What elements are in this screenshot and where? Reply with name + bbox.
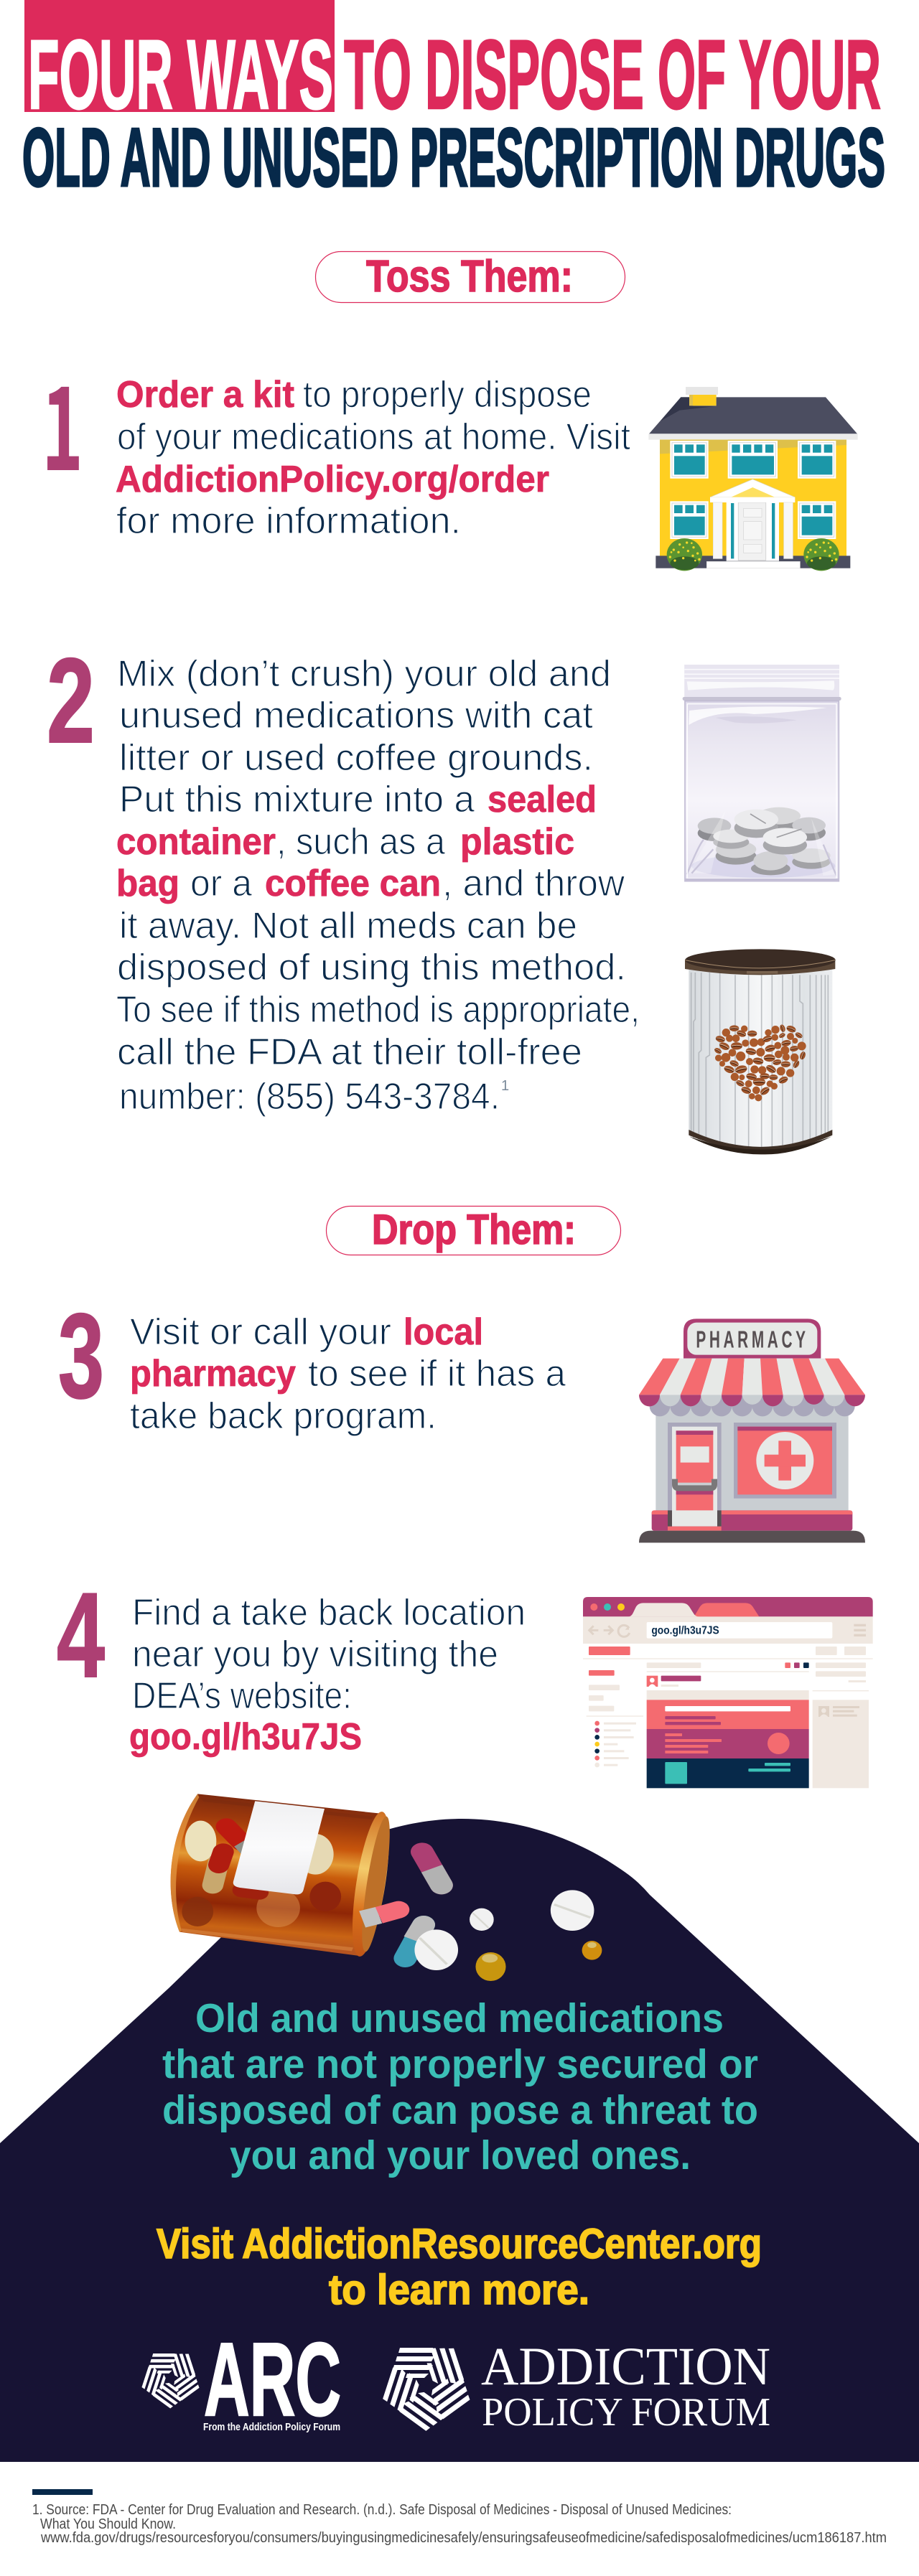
step 3 text: Visit or call your <box>130 1311 391 1353</box>
call to action text: Visit AddictionResourceCenter.org <box>157 2221 762 2267</box>
step 1 number: 1 <box>42 337 83 504</box>
step 4 number: 4 <box>57 1568 105 1702</box>
icon: yellow house <box>648 387 858 571</box>
step 2 text: disposed of using this method. <box>117 947 626 988</box>
capsule: pink <box>363 1901 409 1919</box>
step 2 text: Mix (don’t crush) your old and <box>117 653 611 695</box>
panel: dark call-to-action shape <box>0 1819 919 2462</box>
footnote <box>32 2489 887 2546</box>
step 4 text: DEA’s website: <box>132 1675 352 1717</box>
step 2 text: coffee can <box>265 863 441 904</box>
step 1 text: for more information. <box>116 500 461 542</box>
warning text: disposed of can pose a threat to <box>162 2087 758 2133</box>
step 2 text: To see if this method is appropriate, <box>116 989 640 1031</box>
call to action text <box>157 2221 762 2313</box>
icon: browser window <box>583 1597 873 1788</box>
warning text: that are not properly secured or <box>162 2041 758 2087</box>
step 2 text: number: (855) 543-3784. <box>119 1076 500 1118</box>
step 4 text: Find a take back location <box>132 1592 526 1634</box>
ARC wordmark: ARC <box>204 2321 341 2437</box>
step 2 text: , such as a <box>276 821 445 863</box>
step 2 text: it away. Not all meds can be <box>119 905 577 947</box>
title <box>22 0 885 204</box>
icon: spilled pill bottle <box>171 1794 602 1981</box>
step 2 text: sealed <box>488 779 597 820</box>
icon: plastic zip bag with pills <box>683 665 841 881</box>
step 3 text <box>130 1311 566 1437</box>
step 4 text <box>129 1592 526 1758</box>
ARC tagline: From the Addiction Policy Forum <box>203 2421 340 2433</box>
call to action text: to learn more. <box>329 2267 589 2313</box>
icon: pharmacy storefront <box>639 1319 865 1542</box>
step 2 text: call the FDA at their toll-free <box>117 1031 582 1073</box>
step 2 text: , and throw <box>442 863 625 904</box>
step 3 text: to see if it has a <box>308 1353 566 1395</box>
capsule: purple and grey <box>422 1852 453 1894</box>
step 3 text: take back program. <box>130 1395 437 1437</box>
title line 1 white: FOUR WAYS <box>28 20 333 130</box>
icon: ARC pentagon mark <box>140 2349 203 2411</box>
step 1 text <box>116 374 631 542</box>
title highlight block <box>24 0 335 112</box>
step 1 text: to properly dispose <box>303 374 592 416</box>
step 2 text: or a <box>190 863 252 904</box>
step 2 text: unused medications with cat <box>119 695 594 736</box>
step 4 text: near you by visiting the <box>132 1634 498 1675</box>
step 2 text: Put this mixture into a <box>119 779 475 820</box>
step 2 number: 2 <box>47 633 95 768</box>
step 4 text: goo.gl/h3u7JS <box>129 1716 362 1758</box>
icon: pentagon mark <box>381 2341 476 2435</box>
capsule: teal and grey <box>405 1916 435 1958</box>
step 2 text <box>116 653 640 1118</box>
warning text: you and your loved ones. <box>230 2132 691 2178</box>
section heading: Drop Them: Drop Them: <box>372 1207 576 1253</box>
step 2 text: litter or used coffee grounds. <box>119 737 593 779</box>
wordmark line 2: POLICY FORUM <box>482 2390 770 2435</box>
icon: coffee can with bean heart <box>685 949 836 1154</box>
step 1 text: Order a kit <box>116 374 294 416</box>
footnote: 1. Source: FDA - Center for Drug Evaluation and Research. (n.d.). Safe Disposal of Medicines - Disposal of Unused Medicines: <box>32 2502 732 2518</box>
sign text: PHARMACY: PHARMACY <box>696 1326 809 1352</box>
step 3 text: pharmacy <box>130 1353 296 1395</box>
warning text: Old and unused medications <box>195 1995 724 2041</box>
warning text <box>162 1995 758 2178</box>
step 2 text: bag <box>116 863 179 904</box>
wordmark line 1: ADDICTION <box>481 2337 770 2397</box>
step 3 number: 3 <box>58 1288 104 1423</box>
step 1 text: of your medications at home. Visit <box>117 416 631 458</box>
step 2 text: 1 <box>501 1078 509 1094</box>
section heading: Toss Them: Toss Them: <box>366 252 573 301</box>
step 3 text: local <box>403 1311 483 1353</box>
logo: Addiction Policy Forum <box>381 2337 770 2435</box>
step 2 text: plastic <box>460 821 574 863</box>
address text: goo.gl/h3u7JS <box>651 1625 719 1637</box>
step 1 text: AddictionPolicy.org/order <box>116 459 549 500</box>
logo: ARC <box>140 2321 341 2437</box>
step 2 text: container <box>116 821 276 863</box>
footnote: What You Should Know. <box>40 2516 176 2532</box>
